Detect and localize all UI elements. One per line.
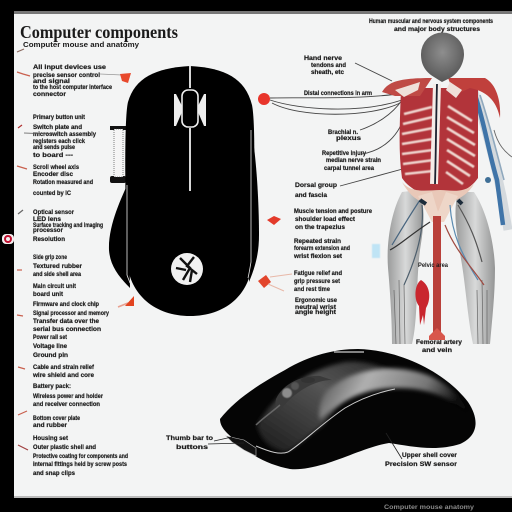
- anatomy labels: Repetitive injury: [322, 150, 366, 157]
- spine: [434, 84, 437, 184]
- figure: leg nerves: [390, 200, 484, 285]
- anatomy labels: Brachial n.: [328, 129, 358, 136]
- left column labels: and rubber: [33, 422, 67, 429]
- left column labels: Side grip zone: [33, 254, 67, 261]
- top highlight: [334, 351, 364, 353]
- left column labels: Firmware and clock chip: [33, 301, 99, 308]
- anatomy labels: and fascia: [295, 192, 327, 199]
- mouse labels: Precision SW sensor: [385, 461, 458, 468]
- cable nubs: [226, 436, 256, 456]
- left column labels: and sends pulse: [33, 144, 75, 151]
- leg label: Pelvic area: [418, 262, 448, 269]
- anatomy labels: Distal connections in arm: [304, 90, 372, 97]
- anatomy labels: and vein: [422, 347, 452, 354]
- left column labels: Rotation measured and: [33, 179, 93, 186]
- left column labels: registers each click: [33, 138, 85, 145]
- anatomy labels: Ergonomic use: [295, 297, 337, 304]
- left column labels: All input devices use: [33, 64, 106, 71]
- anatomy labels: carpal tunnel area: [324, 165, 374, 172]
- left column labels: Main circuit unit: [33, 283, 77, 290]
- scroll cluster: [275, 376, 332, 410]
- body edge highlights: [127, 130, 251, 283]
- left column labels: counted by IC: [33, 190, 71, 197]
- scroll wheel: [174, 90, 206, 127]
- figure: torso: [382, 78, 500, 212]
- anatomy labels: sheath, etc: [311, 69, 344, 76]
- mouse labels: Upper shell cover: [402, 452, 457, 459]
- left column labels: Housing set: [33, 435, 69, 442]
- anatomy labels: forearm extension and: [294, 245, 350, 252]
- left column labels: Optical sensor: [33, 209, 74, 216]
- anatomy labels: Dorsal group: [295, 182, 337, 189]
- left column labels: Wireless power and holder: [33, 393, 103, 400]
- left column labels: internal fittings held by screw posts: [33, 461, 127, 468]
- left wing: [109, 183, 130, 288]
- anatomy labels: Fatigue relief and: [294, 270, 342, 277]
- glossy mouse body: [220, 349, 476, 469]
- center seam: [189, 66, 191, 191]
- left column labels: Scroll wheel axis: [33, 164, 79, 171]
- left column labels: Voltage line: [33, 343, 67, 350]
- anatomy labels: Muscle tension and posture: [294, 208, 372, 215]
- right top caption: and major body structures: [394, 26, 480, 33]
- leader lines: [270, 63, 512, 186]
- left column labels: to the host computer interface: [33, 84, 112, 91]
- figure: head: [421, 32, 464, 82]
- highlight band: [319, 369, 468, 420]
- mouse leader lines: [208, 433, 402, 459]
- anatomy labels: tendons and: [311, 62, 346, 69]
- left column labels: Transfer data over the: [33, 318, 99, 325]
- anatomy labels: [293, 55, 462, 354]
- top rule: [14, 11, 512, 14]
- callout: lower red flag: [118, 296, 134, 307]
- left column labels: microswitch assembly: [33, 131, 96, 138]
- left column labels: Battery pack:: [33, 383, 71, 390]
- left column labels: and side shell area: [33, 271, 81, 278]
- glossy mouse: [220, 349, 476, 469]
- anatomy labels: median nerve strain: [326, 157, 381, 164]
- footer caption: Computer mouse anatomy: [384, 504, 474, 511]
- title: Computer components: [20, 22, 178, 42]
- left column labels: Signal processor and memory: [33, 310, 109, 317]
- left column labels: Primary button unit: [33, 114, 86, 121]
- left column labels: Power rail set: [33, 334, 68, 341]
- left column labels: Encoder disc: [33, 171, 73, 178]
- shoulders: [395, 82, 462, 98]
- figure: pelvis and central artery: [418, 192, 458, 340]
- left column labels: [32, 64, 128, 477]
- left column labels: Textured rubber: [33, 263, 82, 270]
- left column labels: precise sensor control: [33, 72, 100, 79]
- left column labels: Switch plate and: [33, 124, 82, 131]
- silver seam line: [256, 389, 395, 453]
- shell gradient: [257, 362, 395, 452]
- anatomy labels: angle height: [295, 309, 337, 316]
- callout: top red dot with leader: [100, 73, 131, 83]
- anatomy labels: plexus: [336, 135, 361, 142]
- side port bracket: [110, 126, 126, 183]
- left column labels: Surface tracking and imaging: [33, 222, 103, 229]
- right top caption: [369, 18, 493, 33]
- anatomy labels: on the trapezius: [295, 224, 345, 231]
- figure: arm veins: [474, 92, 508, 230]
- ribs right: [446, 106, 475, 184]
- top-down mouse diagram: [109, 66, 259, 316]
- left column labels: LED lens: [33, 216, 61, 223]
- right wing: [249, 122, 259, 282]
- ribs left: [402, 107, 434, 174]
- left column labels: and signal: [33, 78, 70, 85]
- left red markers: [17, 49, 55, 450]
- left column labels: wire shield and core: [32, 372, 94, 379]
- left column labels: processor: [33, 227, 63, 234]
- bottom rule: [14, 496, 512, 498]
- side icon: red badge: [2, 234, 14, 244]
- left column labels: Protective coating for components and: [33, 453, 128, 460]
- left column labels: serial bus connection: [33, 326, 101, 333]
- left column labels: Ground pin: [33, 352, 68, 359]
- left column labels: Outer plastic shell and: [33, 444, 96, 451]
- left column labels: connector: [33, 91, 66, 98]
- mouse labels: Thumb bar to: [166, 435, 213, 442]
- anatomy labels: shoulder load effect: [295, 216, 356, 223]
- figure: legs: [388, 190, 495, 344]
- anatomy labels: Femoral artery: [416, 339, 462, 346]
- anatomy labels: Hand nerve: [304, 55, 342, 62]
- left column labels: and snap clips: [33, 470, 75, 477]
- anatomy labels: grip pressure set: [294, 278, 341, 285]
- left column labels: to board ---: [33, 152, 73, 159]
- left column labels: and receiver connection: [33, 401, 100, 408]
- left column labels: Bottom cover plate: [33, 415, 80, 422]
- mouse labels: [166, 435, 458, 468]
- left column labels: Resolution: [33, 236, 65, 243]
- mouse body: [125, 66, 254, 316]
- logo emblem: [171, 253, 203, 285]
- anatomy labels: Repeated strain: [294, 238, 341, 245]
- mouse labels: buttons: [176, 444, 209, 451]
- subtitle: Computer mouse and anatomy: [23, 42, 139, 49]
- red anatomy markers: [258, 93, 292, 291]
- blue glow accent: [372, 244, 380, 258]
- organ: red heart shape: [415, 280, 429, 325]
- anatomy labels: and rest time: [294, 286, 330, 293]
- left column labels: Cable and strain relief: [33, 364, 95, 371]
- front left highlight: [256, 405, 280, 425]
- anatomy labels: wrist flexion set: [293, 253, 343, 260]
- left column labels: board unit: [33, 291, 64, 298]
- anatomy labels: neutral wrist: [295, 304, 337, 311]
